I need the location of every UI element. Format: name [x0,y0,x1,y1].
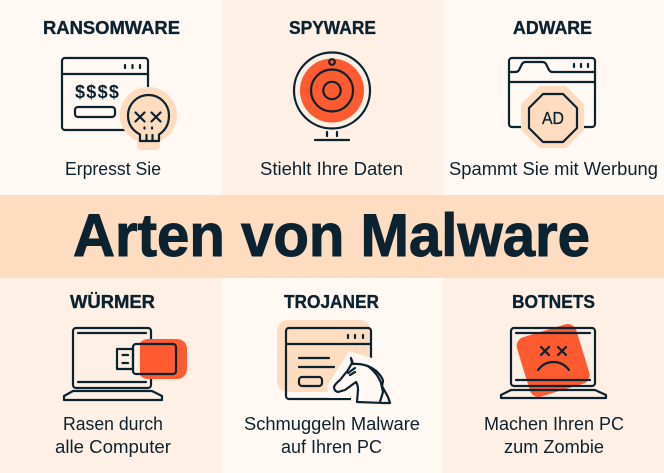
caption: worms: Rasen durch [63,413,163,434]
caption: adware: Spammt Sie mit Werbung [449,158,658,179]
panel: spyware [222,0,443,195]
heading: ransomware: RANSOMWARE [43,18,180,38]
caption: botnets: Machen Ihren PC [484,413,624,434]
panel: botnets [443,278,664,473]
caption: ransomware: Erpresst Sie [65,158,161,179]
banner: title: Arten von Malware [73,202,590,269]
icon: browser with ad sign [509,58,595,148]
icon: webcam [294,52,370,140]
icon: laptop with sad face [501,322,606,399]
caption: trojans: auf Ihren PC [281,436,382,457]
caption: trojans [244,413,420,457]
panel: trojans [222,278,443,473]
heading: worms: WÜRMER [70,292,155,312]
caption: spyware: Stiehlt Ihre Daten [260,158,403,179]
icon: laptop with usb stick [64,328,187,400]
panel: adware [443,0,664,195]
heading: adware: ADWARE [513,18,592,38]
icon: ransom window with skull [62,58,177,150]
caption: botnets [484,413,624,457]
caption: trojans: Schmuggeln Malware [244,413,420,434]
panel: ransomware [0,0,222,195]
icon: browser with ad sign: AD [542,108,564,128]
icon: window with trojan horse [277,320,396,410]
heading: botnets: BOTNETS [512,292,595,312]
caption: botnets: zum Zombie [504,436,604,457]
heading: trojans: TROJANER [284,292,379,312]
caption: worms [55,413,171,457]
icon: ransom window with skull: $$$$ [75,82,120,102]
panel: worms [0,278,222,473]
heading: spyware: SPYWARE [289,18,376,38]
banner: title [0,195,664,278]
caption: worms: alle Computer [55,436,171,457]
